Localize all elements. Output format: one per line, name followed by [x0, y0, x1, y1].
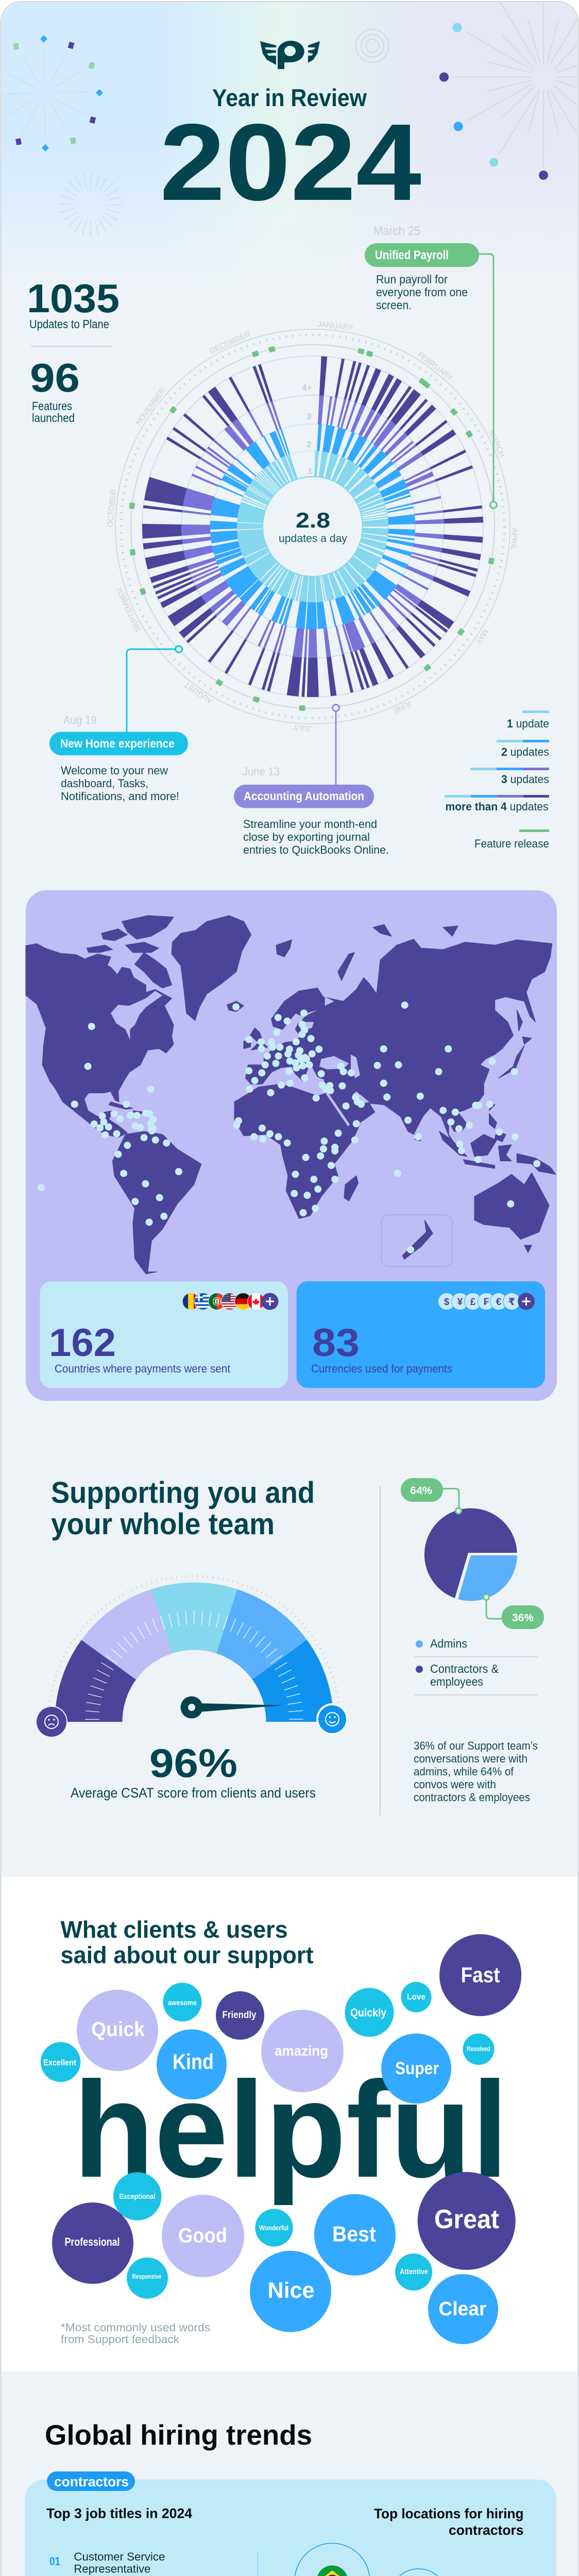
word bubbles: Excellent — [43, 2058, 76, 2067]
stat: 96% CSAT — [71, 1740, 316, 1801]
currency row: € — [496, 1297, 502, 1308]
concentric rings decoration — [356, 29, 389, 62]
month labels: JULY — [293, 723, 312, 733]
month labels: MARCH — [487, 429, 506, 459]
stat: 1035 updates and 96 features: Updates to Plane — [29, 317, 109, 331]
36% tag — [483, 1594, 544, 1629]
title: 2024: 2024 — [160, 101, 421, 223]
outer calendar ring with ticks — [115, 329, 510, 724]
card: 162 countries — [40, 1281, 288, 1388]
callout: New Home experience: Welcome to your new — [61, 764, 168, 777]
legend for radial chart: 2 updates — [501, 745, 549, 758]
month labels: JANUARY — [317, 320, 354, 332]
word bubbles: Professional — [65, 2235, 120, 2248]
big word: helpful: helpful — [73, 2054, 508, 2207]
panel: contractors: Top 3 job titles in 2024 — [46, 2506, 192, 2521]
stat: 96% CSAT: Average CSAT score from clients and users — [71, 1785, 316, 1801]
header gradient — [2, 2, 577, 361]
word bubbles: Super — [395, 2059, 439, 2078]
stat: 1035 updates and 96 features — [27, 276, 120, 425]
legend for radial chart: Feature release — [474, 837, 549, 850]
callout: Accounting Automation — [234, 705, 389, 856]
callout: Accounting Automation: Accounting Automation — [244, 789, 364, 803]
job title list: Customer Service — [74, 2550, 165, 2563]
footnote: from Support feedback — [61, 2333, 180, 2346]
word bubbles: Exceptional — [120, 2192, 156, 2201]
month labels: APRIL — [509, 528, 519, 551]
month labels: MAY — [474, 627, 490, 646]
footnote: *Most commonly used words — [61, 2321, 210, 2334]
word bubbles: Quickly — [350, 2006, 387, 2019]
job title list — [49, 2550, 227, 2576]
word bubbles: amazing — [275, 2043, 328, 2059]
currency row — [438, 1293, 535, 1310]
month labels — [106, 320, 519, 733]
stat: 96% CSAT: 96% — [149, 1740, 237, 1786]
callout: Accounting Automation: entries to QuickBooks Online. — [243, 843, 389, 856]
callout: Accounting Automation: close by exporting journal — [243, 831, 370, 843]
legend for radial chart — [445, 710, 549, 850]
word bubbles — [41, 1934, 521, 2344]
logo — [260, 41, 320, 69]
stat: 1035 updates and 96 features: Features — [32, 399, 72, 413]
word bubbles: Wonderful — [259, 2224, 288, 2232]
pie legend — [414, 1637, 538, 1695]
ring scale labels: 1 — [308, 466, 313, 476]
ring scale labels: 4+ — [302, 383, 312, 393]
callout: Unified Payroll: March 25 — [373, 224, 420, 238]
card: 162 countries: 162 — [49, 1321, 116, 1365]
job title list: 01 — [49, 2555, 60, 2568]
needle — [180, 1696, 284, 1719]
callout: New Home experience: dashboard, Tasks, — [61, 777, 148, 790]
card: 83 currencies — [297, 1281, 545, 1388]
title: Year in Review: Year in Review — [212, 84, 367, 111]
heading: top locations: Top locations for hiring — [374, 2506, 523, 2521]
callout: Unified Payroll: Run payroll for — [376, 273, 448, 286]
64% tag — [401, 1478, 462, 1514]
callout: New Home experience: Notifications, and more! — [61, 790, 179, 803]
word bubbles: Kind — [173, 2049, 214, 2074]
callout: New Home experience — [49, 646, 188, 803]
chart centre: 2.8 updates a day: updates a day — [279, 533, 348, 545]
month labels: OCTOBER — [106, 489, 118, 528]
pin: Brazil — [295, 2543, 370, 2576]
card: 83 currencies: 83 — [312, 1321, 360, 1365]
tag: contractors — [47, 2471, 135, 2491]
chart centre: 2.8 updates a day — [279, 508, 348, 545]
word bubbles: awesome — [168, 1998, 197, 2007]
stat: 1035 updates and 96 features: 1035 — [27, 276, 120, 321]
month labels: JUNE — [391, 699, 414, 716]
firework: left with diamonds — [2, 35, 103, 151]
firework: right with dots — [439, 2, 577, 180]
text: support conversations: conversations were with — [414, 1752, 527, 1765]
currency row: ¥ — [457, 1297, 463, 1308]
word bubbles: Fast — [461, 1963, 500, 1987]
icon: happy face — [316, 1703, 348, 1735]
gauge segments — [47, 1574, 342, 1869]
month labels: SEPTEMBER — [115, 586, 143, 633]
heading: Supporting you and your whole team — [51, 1476, 315, 1541]
pie legend: employees — [430, 1675, 483, 1688]
word bubbles: Resolved — [467, 2045, 490, 2053]
text: support conversations — [414, 1739, 538, 1804]
icon: sad face — [36, 1706, 67, 1738]
heading: What clients & users — [61, 1916, 287, 1943]
day bars in four rings — [131, 345, 495, 708]
currency row: ₹ — [508, 1297, 515, 1308]
heading — [61, 1916, 313, 1968]
heading: Supporting you and your whole team: Supporting you and — [51, 1476, 315, 1510]
ring scale labels: 2 — [306, 439, 312, 449]
legend for radial chart: 1 update — [507, 717, 549, 730]
footnote — [61, 2321, 210, 2346]
currency row: £ — [470, 1297, 476, 1308]
text: support conversations: convos were with — [414, 1778, 496, 1791]
ring scale labels — [302, 383, 313, 476]
word bubbles: Attentive — [400, 2267, 428, 2276]
stat: 1035 updates and 96 features: launched — [32, 411, 75, 425]
word bubbles: Responsive — [132, 2273, 162, 2280]
word bubbles: Best — [332, 2222, 376, 2246]
flag row — [182, 1293, 278, 1310]
card: 83 currencies: Currencies used for payments — [311, 1362, 452, 1375]
stat: 1035 updates and 96 features: 96 — [30, 355, 80, 400]
payment destination dots — [41, 1005, 537, 1250]
card: 162 countries: Countries where payments were sent — [55, 1362, 230, 1375]
callout: Unified Payroll — [365, 224, 497, 508]
word bubbles: Friendly — [223, 2010, 257, 2021]
word bubbles: Quick — [91, 2018, 145, 2041]
New Zealand inset frame — [381, 1215, 452, 1266]
heading: top locations — [374, 2506, 523, 2538]
heading: Global hiring trends: Global hiring trends — [45, 2419, 312, 2451]
radial chart of daily updates — [106, 320, 519, 733]
text: support conversations: 36% of our Support team’s — [414, 1739, 538, 1752]
callout: Unified Payroll: everyone from one — [376, 285, 468, 299]
36% tag: 36% — [512, 1612, 534, 1624]
map land masses — [26, 916, 556, 1274]
text: support conversations: admins, while 64% of — [414, 1765, 514, 1778]
month labels: DECEMBER — [208, 330, 252, 355]
heading: said about our support — [61, 1941, 313, 1968]
word bubbles: Love — [407, 1993, 425, 2002]
callout: Accounting Automation: June 13 — [243, 765, 280, 778]
pie legend: Contractors & — [430, 1662, 499, 1675]
word bubbles: Clear — [439, 2298, 487, 2320]
pin: Canada — [399, 2568, 438, 2576]
panel: world map — [26, 890, 557, 1401]
64% tag: 64% — [410, 1485, 432, 1497]
currency row: ₣ — [484, 1297, 489, 1308]
panel: contractors — [25, 2471, 556, 2576]
callout: Unified Payroll: Unified Payroll — [375, 248, 449, 262]
currency row: $ — [444, 1297, 450, 1308]
callout: New Home experience: New Home experience — [60, 737, 175, 750]
panel: word cloud — [2, 1877, 577, 2371]
month labels: NOVEMBER — [134, 386, 167, 427]
callout: New Home experience: Aug 19 — [63, 714, 97, 726]
chart centre: 2.8 updates a day: 2.8 — [296, 508, 330, 532]
pie legend: Admins — [430, 1637, 467, 1650]
legend for radial chart: more than 4 updates — [445, 800, 548, 813]
word bubbles: Great — [434, 2205, 499, 2234]
tag: contractors: contractors — [54, 2474, 129, 2489]
text: support conversations: contractors & employees — [414, 1791, 530, 1804]
pie chart: admins vs contractors — [401, 1478, 544, 1629]
small burst — [67, 181, 114, 228]
legend for radial chart: 3 updates — [501, 773, 549, 786]
callout: Accounting Automation: Streamline your month-end — [243, 818, 377, 831]
divider — [380, 1486, 381, 1816]
month labels: FEBRUARY — [416, 350, 454, 382]
word bubbles: Nice — [268, 2278, 314, 2303]
ring scale labels: 3 — [306, 412, 312, 421]
callout: Unified Payroll: screen. — [376, 298, 412, 312]
heading: top locations: contractors — [449, 2522, 523, 2538]
word bubbles: Good — [178, 2225, 227, 2247]
gauge: CSAT score — [36, 1574, 348, 1869]
month labels: AUGUST — [183, 680, 214, 705]
heading: Supporting you and your whole team: your whole team — [51, 1507, 275, 1541]
job title list: Representative — [74, 2563, 150, 2575]
